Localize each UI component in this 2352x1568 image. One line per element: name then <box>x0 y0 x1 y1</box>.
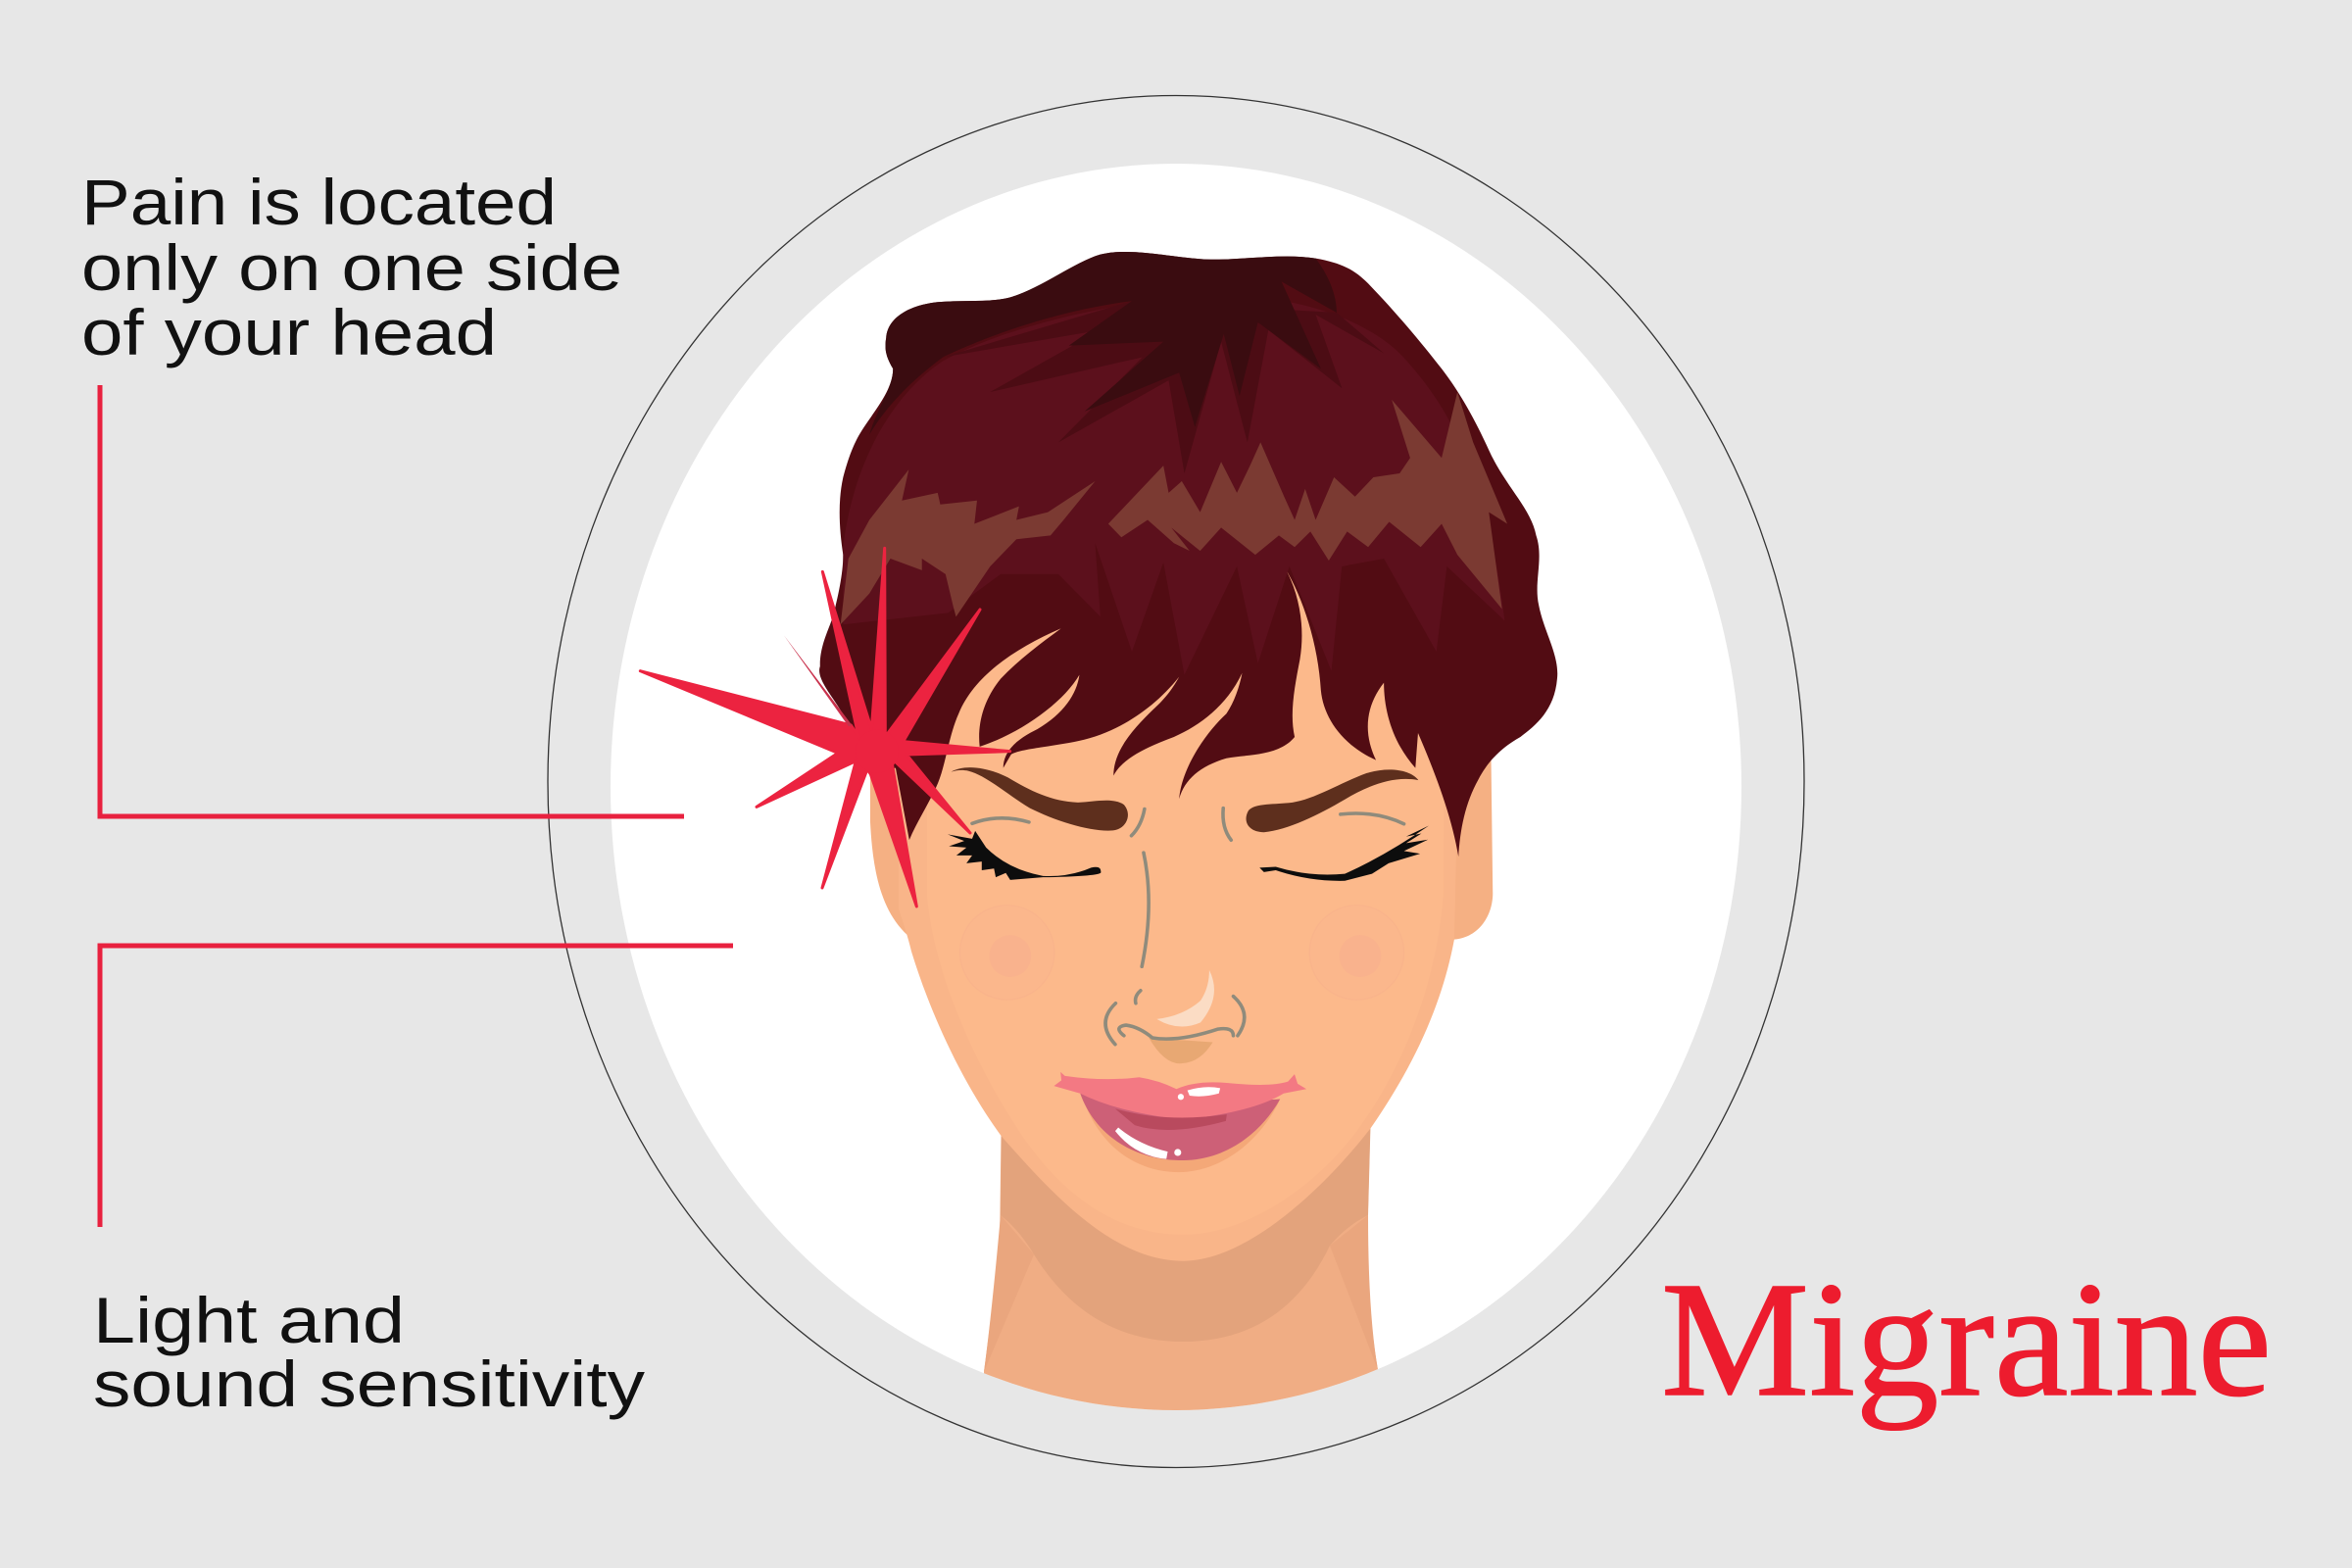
title: Migraine <box>1661 1249 2272 1431</box>
facial features <box>870 546 1493 1261</box>
nose highlight <box>1156 970 1214 1027</box>
cheek blush right <box>1309 906 1404 1000</box>
text: pain location: Pain is located <box>81 166 557 238</box>
dark crown <box>869 252 1337 435</box>
text: light and sound <box>93 1284 645 1420</box>
right eye lash <box>1259 826 1429 881</box>
mouth <box>1054 1072 1306 1172</box>
text: pain location <box>81 166 622 368</box>
pain starburst <box>640 548 1010 906</box>
neck <box>984 1129 1378 1410</box>
right eyebrow <box>1247 769 1418 832</box>
nose line <box>1119 1025 1233 1039</box>
inner white circle <box>611 164 1741 1410</box>
callout line: pain location <box>100 385 684 816</box>
text: pain location: only on one side <box>81 231 622 304</box>
outer circle outline <box>548 96 1804 1468</box>
left eyebrow <box>952 767 1128 831</box>
under-nose shadow <box>1149 1038 1213 1063</box>
hair highlight left <box>841 469 1095 624</box>
hair <box>819 252 1557 857</box>
hair mid-tone top <box>843 296 1504 675</box>
cheek blush left <box>959 906 1054 1000</box>
ears and side of head <box>870 612 1493 940</box>
left eye lash <box>948 831 1101 880</box>
text: light and sound: sound sensitivity <box>93 1348 645 1420</box>
illustration: woman with migraine <box>640 252 1557 1431</box>
crown shadow streaks <box>943 301 1384 473</box>
callout line: sensitivity <box>100 946 733 1227</box>
text: pain location: of your head <box>81 296 497 368</box>
face <box>899 546 1463 1261</box>
eyelid and wrinkle lines <box>972 808 1404 1045</box>
text: light and sound: Light and <box>93 1284 405 1356</box>
hair highlight right <box>1108 392 1507 609</box>
